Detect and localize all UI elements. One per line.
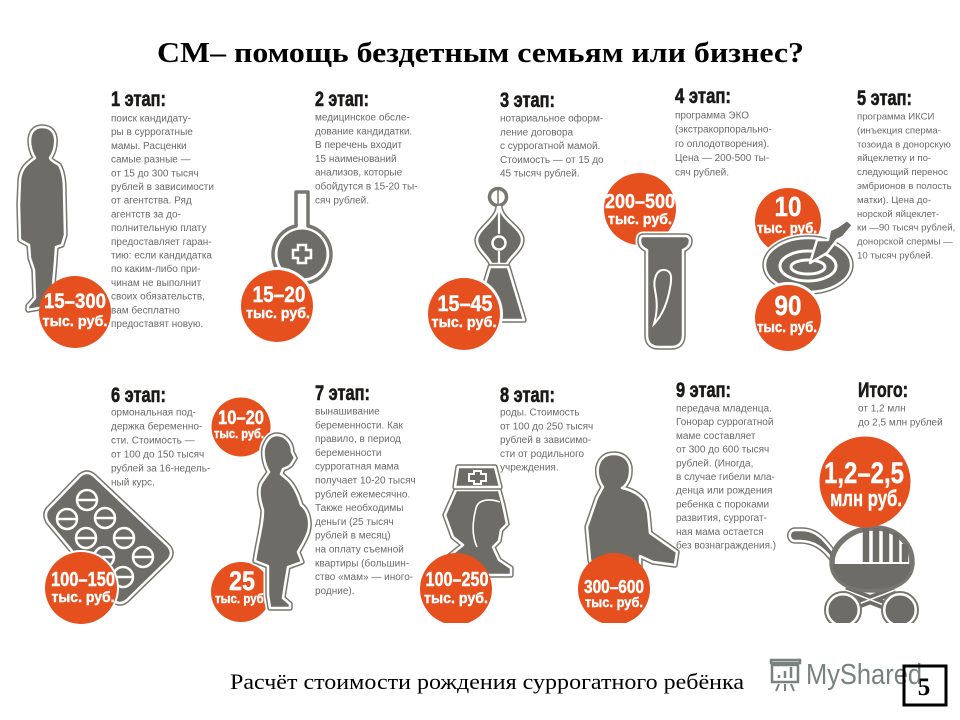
price badge: 200–500: 200–500 [605,191,675,213]
text: step 6: от 100 до 150 тысяч [111,450,204,460]
text: step 9: денца или рождения [676,486,772,497]
text: step 9: маме составляет [676,431,756,442]
text: step 1: агентств за до- [111,209,181,220]
text: step 3: нотариальное оформ- [500,112,603,124]
icon: child silhouette [19,127,65,310]
heading: step 3: 3 этап: [500,89,555,112]
panel: step 1 [19,88,214,348]
icon: test tube [640,236,690,347]
text: step 2: обойдутся в 15-20 ты- [315,180,417,192]
text: step 7: правило, в период [315,434,401,445]
text: step 7: рублей в месяц) [315,530,391,542]
text: step 7: родние). [315,586,355,597]
text: step 1: полнительную плату [111,223,207,234]
icon: baby [587,454,677,590]
text: step 1: от агентства. Ряд [111,196,192,207]
price badge: 25 [211,562,271,622]
text: step 9: Гонорар суррогатной [676,417,773,428]
icon: flask [273,192,331,283]
text: step 7: беременности [315,447,382,459]
text: step 4: Цена — 200-500 ты- [675,153,769,164]
text: step 7: Также необходимы [315,502,403,514]
icon: petri dish with pipette [765,220,853,292]
price badge: 300–600 [578,553,650,625]
text: step 1: самые разные — [111,155,191,166]
panel: step 7 [211,382,416,622]
icon: fountain pen nib [474,188,524,320]
price badge: 25: тыс. руб. [215,591,267,606]
text: step 5: норской яйцеклет- [857,209,939,220]
heading: step 9: 9 этап: [676,379,731,402]
text: step 9: развития, суррогат- [676,513,767,524]
text: step 1: своих обязательств, [111,291,205,303]
text: step 6: ормональная под- [111,408,196,418]
text: step 2: В перечень входит [315,140,402,151]
logo: MyShared watermark: MyShared [806,659,922,691]
text: step 2: анализов, которые [315,168,403,179]
price badge: 10–20: тыс. руб. [214,426,264,441]
panel: step 4 [604,85,772,347]
text: step 7: беременности. Как [315,419,403,431]
text: step 1: тию: если кандидатка [111,250,212,262]
text: step 7: на оплату съемной [315,544,404,556]
price badge: 15–45 [425,275,503,353]
text: step 1: по каким-либо при- [111,263,200,275]
price badge: 15–20: тыс. руб. [246,305,310,322]
panel: step 8 [420,384,593,625]
text: step 5: следующий перенос [857,167,948,178]
text: step 9: от 300 до 600 тысяч [676,445,769,456]
text: step 4: сяч рублей. [675,166,729,178]
text: step 9: рублей. (Иногда, [676,457,753,469]
caption: Расчёт стоимости рождения суррогатного ребёнка [230,669,744,694]
text: step 7: квартиры (большин- [315,557,409,569]
icon: pregnant woman [255,435,309,608]
text: step 3: 45 тысяч рублей. [500,168,580,180]
heading: step 1: 1 этап: [111,88,166,111]
text: step 5: эмбрионов в полость [857,181,952,192]
price badge: 10–20: 10–20 [218,408,264,429]
text: step 4: программа ЭКО [675,110,749,122]
price badge: 100–250: тыс. руб. [424,590,488,607]
price badge: 15–20 [238,267,316,345]
price badge: 1,2–2,5: млн руб. [830,486,902,511]
text: step 6: ный курс. [111,478,155,488]
text: step 7: ство «мам» — иного- [315,572,413,583]
heading: step 4: 4 этап: [675,85,731,108]
text: total: от 1,2 млн [858,404,906,414]
text: step 7: рублей ежемесячно. [315,488,410,500]
text: step 7: вынашивание [315,406,380,418]
text: step 3: с суррогатной мамой. [500,141,600,152]
text: step 1: мамы. Расценки [111,141,187,152]
price badge: 200–500 [604,173,676,245]
text: step 1: рублей в зависимости [111,181,214,193]
text: step 2: сяч рублей. [315,194,369,206]
text: step 7: деньги (25 тысяч [315,517,394,528]
text: step 8: от 100 до 250 тысяч [500,421,593,432]
text: step 1: предоставляет гаран- [111,237,212,248]
price badge: 300–600: тыс. руб. [585,594,643,610]
price badge: 25: 25 [229,566,255,596]
text: step 8: рублей в зависимо- [500,434,591,446]
price badge: 100–150: тыс. руб. [52,589,114,606]
text: step 5: донорской спермы — [857,237,953,248]
text: step 1: чинам не выполнит [111,278,202,289]
slide number box: 5 [918,674,930,701]
text: step 8: роды. Стоимость [500,408,580,418]
text: step 9: в случае гибели мла- [676,471,775,483]
text: step 5: матки). Цена до- [857,195,931,206]
icon: baby pram [790,528,918,628]
text: step 5: 10 тысяч рублей. [857,250,933,262]
text: step 4: го оплодотворения). [675,139,769,150]
panel: total [790,379,943,628]
text: step 4: (экстракорпорально- [675,125,772,136]
heading: step 2: 2 этап: [315,88,369,111]
price badge: 15–45: 15–45 [438,291,492,316]
price badge: 200–500: тыс. руб. [608,211,672,228]
panel: step 5 [752,87,955,354]
text: step 2: медицинское обсле- [315,112,410,124]
text: step 1: поиск кандидату- [111,114,191,124]
price badge: 15–20: 15–20 [252,282,306,307]
text: step 2: дование кандидатки. [315,126,412,137]
text: step 1: вам бесплатно [111,304,180,316]
text: step 2: 15 наименований [315,154,397,165]
text: step 9: передача младенца. [676,404,772,414]
price badge: 100–150: 100–150 [51,569,115,591]
price badge: 10–20 [212,398,270,456]
price badge: 100–250 [420,553,492,625]
text: step 3: Стоимость — от 15 до [500,155,604,166]
text: step 3: ление договора [500,127,574,138]
price badge: 90: 90 [774,290,802,321]
heading: total: Итого: [858,379,908,402]
logo: MyShared watermark [771,659,922,691]
panel: step 6 [43,384,210,626]
text: step 1: от 15 до 300 тысяч [111,168,199,179]
text: step 5: (инъекция сперма- [857,125,941,136]
price badge: 15–45: тыс. руб. [432,314,496,331]
text: step 1: предоставят новую. [111,319,203,330]
price badge: 10: тыс. руб. [757,220,817,237]
heading: step 8: 8 этап: [500,384,555,407]
text: step 8: учреждения. [500,463,559,474]
panel: step 9 [578,379,776,625]
price badge: 15–300: 15–300 [44,290,106,313]
heading: step 6: 6 этап: [111,384,166,407]
panel: step 3 [425,89,604,353]
text: step 9: ребенка с пороками [676,498,769,510]
text: step 6: держка беременно- [111,420,202,432]
price badge: 300–600: 300–600 [584,577,644,597]
text: step 9: ная мама остается [676,527,764,538]
text: step 5: тозоида в донорскую [857,139,951,150]
icon: blister pack [46,473,171,603]
price badge: 10 [755,188,821,254]
text: step 5: ки —90 тысяч рублей, [857,223,955,234]
text: step 6: сти. Стоимость — [111,436,195,446]
text: step 9: без вознаграждения.) [676,540,776,552]
price badge: 90 [752,282,824,354]
price badge: 10: 10 [774,191,802,222]
text: total: до 2,5 млн рублей [858,416,943,428]
price badge: 90: тыс. руб. [757,319,817,336]
price badge: 1,2–2,5 [820,436,910,528]
text: step 7: получает 10-20 тысяч [315,476,416,486]
panel: step 2 [238,88,417,345]
price badge: 1,2–2,5: 1,2–2,5 [824,457,904,490]
price badge: 15–300 [39,276,111,348]
text: step 7: суррогатная мама [315,462,400,473]
text: step 6: рублей за 16-недель- [111,462,210,474]
text: step 8: сти от родильного [500,449,585,460]
icon: nurse [445,467,511,575]
heading: step 5: 5 этап: [857,87,912,110]
price badge: 100–150 [43,550,119,626]
title: СМ– помощь бездетным семьям или бизнес? [157,37,804,69]
text: step 1: ры в суррогатные [111,127,193,138]
price badge: 100–250: 100–250 [426,569,488,591]
text: step 5: программа ИКСИ [857,112,935,122]
text: step 5: яйцеклетку и по- [857,153,931,164]
heading: step 7: 7 этап: [315,382,370,405]
slide number box [904,666,946,705]
price badge: 15–300: тыс. руб. [42,313,108,330]
